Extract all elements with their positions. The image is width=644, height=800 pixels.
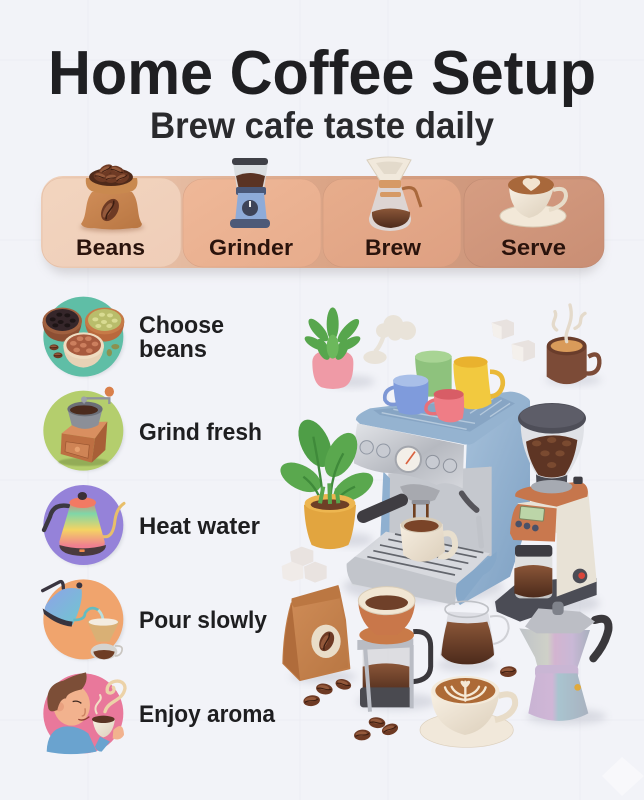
icon: potted succulent [303, 307, 375, 389]
step label: enjoy aroma: Enjoy aroma [139, 701, 276, 728]
icon: sugar cubes [492, 319, 535, 362]
icon: grinder [230, 158, 270, 228]
steam wand [462, 493, 477, 510]
icon: moka pot [519, 602, 608, 725]
icon: coffee bag [283, 585, 357, 683]
step label: choose beans [139, 312, 224, 363]
panel: four-step process bar [41, 157, 604, 274]
step label: Serve: Serve [501, 235, 566, 260]
icon: pour-over on French press [357, 587, 437, 712]
step icon: heat water [43, 485, 124, 566]
step label: Beans: Beans [76, 235, 145, 260]
step label: heat water: Heat water [139, 513, 260, 540]
icon: scattered coffee beans [303, 666, 517, 741]
icon: espresso machine [343, 392, 530, 605]
step icon: pour slowly [43, 579, 124, 660]
step icon: grind fresh [43, 387, 124, 471]
icon: latte cup and saucer [420, 676, 515, 747]
drip tray [347, 532, 490, 605]
top deck [356, 392, 529, 445]
icon: burr grinder [493, 403, 600, 622]
espresso cup [438, 533, 455, 556]
icon: latte cup on saucer [500, 176, 566, 227]
back panel [388, 467, 492, 557]
watermark sparkle [602, 757, 644, 796]
icon: brown steaming mug [545, 305, 602, 385]
step label: choose beans: beans [139, 336, 207, 363]
icon: steam cloud [363, 315, 416, 364]
step label: choose beans: Choose [139, 312, 224, 339]
step label: pour slowly: Pour slowly [139, 607, 268, 634]
icon: bean sack [80, 162, 144, 232]
illustration: home coffee setup scene, upper [276, 305, 602, 622]
icon: sugar cube stack [282, 547, 327, 583]
icon: stacked coloured cups [385, 351, 503, 422]
icon: leafy plant in yellow pot [276, 414, 378, 549]
step label: Grinder: Grinder [209, 235, 293, 260]
step icon: choose beans [42, 297, 124, 377]
portafilter [400, 484, 440, 503]
icon: pour-over carafe [367, 157, 421, 231]
step label: Brew: Brew [365, 235, 422, 260]
illustration: home coffee setup scene, lower [283, 585, 608, 747]
front control panel [354, 423, 464, 488]
step icon: enjoy aroma [43, 672, 125, 754]
title: Home Coffee Setup [48, 39, 596, 108]
subtitle: Brew cafe taste daily [150, 105, 494, 146]
step label: grind fresh: Grind fresh [139, 419, 262, 446]
machine body [453, 400, 530, 605]
icon: glass carafe [437, 601, 509, 672]
